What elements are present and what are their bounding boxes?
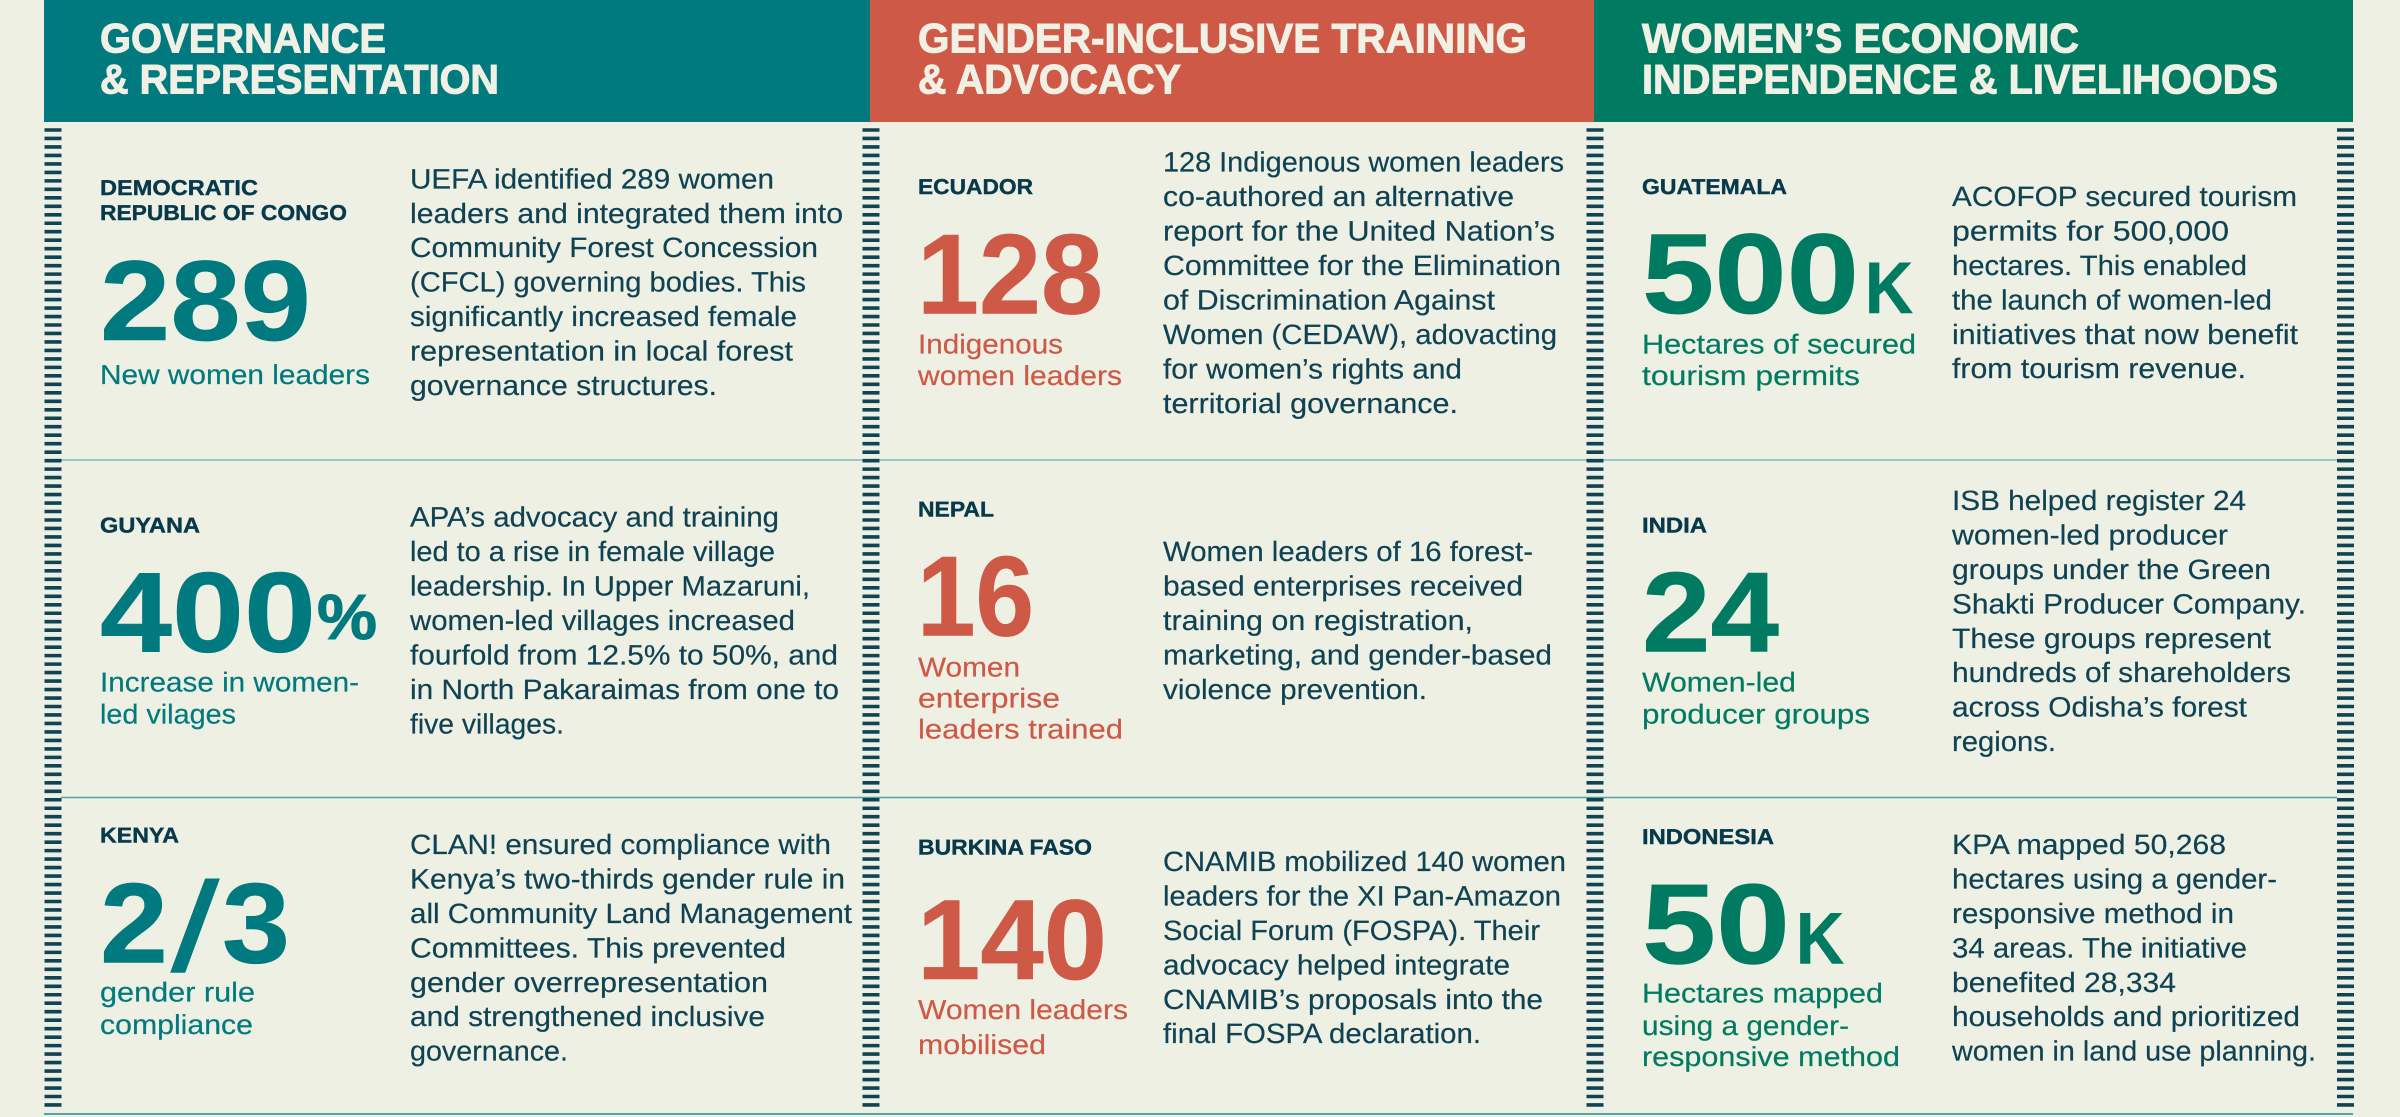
stat label [918, 652, 1123, 744]
card: Nepal [917, 498, 1552, 744]
card: Kenya [100, 823, 852, 1067]
description: responsive method in [1952, 898, 2234, 929]
card: Democratic Republic of Congo [100, 163, 843, 401]
description: across Odisha’s forest [1952, 692, 2247, 723]
description: leaders for the XI Pan-Amazon [1163, 880, 1561, 911]
heading: women's economic independence and livelihoods [1594, 0, 2353, 122]
big number: 140: 140 [917, 877, 1107, 1004]
stat label: mobilised [918, 1029, 1046, 1060]
heading: gender-inclusive training and advocacy: & ADVOCACY [918, 55, 1181, 102]
panel: gender-inclusive training and advocacy column [870, 0, 1594, 1060]
stat label [100, 977, 255, 1040]
heading: governance and representation: GOVERNANCE [100, 14, 386, 62]
heading: governance and representation: & REPRESENTATION [100, 55, 499, 102]
big number: 2/3: / [171, 856, 220, 998]
stat label: producer groups [1642, 698, 1870, 729]
description: the launch of women-led [1952, 284, 2272, 315]
description: ISB helped register 24 [1952, 485, 2246, 516]
description: final FOSPA declaration. [1163, 1018, 1481, 1049]
description [1163, 846, 1566, 1049]
description: Committees. This prevented [410, 932, 786, 963]
description: Women (CEDAW), adovacting [1163, 319, 1557, 350]
description: governance structures. [410, 370, 717, 401]
big number: 289: 289 [100, 238, 311, 365]
heading: women's economic independence and livelihoods: WOMEN’S ECONOMIC [1642, 14, 2079, 62]
stat label: women leaders [917, 360, 1122, 391]
stat label: gender rule [100, 977, 255, 1008]
description: marketing, and gender-based [1163, 639, 1552, 670]
description [409, 502, 839, 739]
big number: 2/3 [100, 856, 290, 998]
description: households and prioritized [1952, 1001, 2300, 1032]
big number: 50K: 50 [1642, 861, 1790, 988]
description: leadership. In Upper Mazaruni, [410, 571, 810, 602]
description [410, 829, 852, 1067]
description: gender overrepresentation [410, 967, 768, 998]
stat label: Women leaders [918, 994, 1128, 1025]
description: violence prevention. [1163, 674, 1427, 705]
country label: KENYA [100, 823, 179, 847]
description [1163, 147, 1564, 419]
country label: NEPAL [918, 498, 994, 522]
description: based enterprises received [1163, 570, 1523, 601]
description [1951, 829, 2316, 1067]
description: Community Forest Concession [410, 232, 818, 263]
big number: 16: 16 [917, 534, 1034, 661]
big number: 400%: 400 [100, 550, 316, 677]
description: territorial governance. [1163, 388, 1458, 419]
description: 128 Indigenous women leaders [1163, 147, 1564, 178]
card: Indonesia [1642, 825, 2316, 1072]
description: CNAMIB’s proposals into the [1163, 984, 1543, 1015]
heading: gender-inclusive training and advocacy: GENDER-INCLUSIVE TRAINING [918, 14, 1527, 62]
stat label [917, 328, 1122, 391]
description: and strengthened inclusive [410, 1001, 765, 1032]
panel: women's economic independence and livelihoods column [1594, 0, 2353, 1072]
big number: 400%: % [317, 581, 377, 653]
description: Social Forum (FOSPA). Their [1163, 915, 1540, 946]
description: KPA mapped 50,268 [1952, 829, 2226, 860]
description: ACOFOP secured tourism [1952, 181, 2297, 212]
description: fourfold from 12.5% to 50%, and [410, 640, 838, 670]
description: of Discrimination Against [1163, 284, 1495, 316]
card: Burkina Faso [917, 836, 1566, 1060]
description: hectares using a gender- [1952, 863, 2277, 894]
description: (CFCL) governing bodies. This [410, 267, 806, 298]
stat label [1642, 667, 1870, 729]
panel: governance and representation column [44, 0, 870, 1067]
card: Ecuador [917, 147, 1564, 419]
stat label: Women-led [1642, 667, 1796, 698]
description: groups under the Green [1952, 554, 2271, 585]
big number: 2/3: 2 [100, 861, 168, 988]
description: permits for 500,000 [1952, 215, 2229, 246]
description: leaders and integrated them into [410, 198, 843, 229]
description [410, 163, 843, 401]
stat label: Hectares mapped [1642, 978, 1883, 1009]
description [1952, 181, 2298, 384]
description: CNAMIB mobilized 140 women [1163, 846, 1566, 877]
description: significantly increased female [410, 301, 797, 332]
description: These groups represent [1952, 623, 2271, 654]
stat label: tourism permits [1642, 360, 1860, 391]
description: from tourism revenue. [1952, 353, 2246, 384]
description: for women’s rights and [1163, 353, 1462, 384]
description: Shakti Producer Company. [1952, 588, 2306, 619]
description: governance. [410, 1036, 568, 1067]
country label: ECUADOR [918, 175, 1033, 199]
stat label: Increase in women- [100, 667, 359, 698]
description: all Community Land Management [410, 898, 852, 929]
country label: INDIA [1642, 513, 1707, 537]
big number: 500K: K [1865, 248, 1913, 329]
big number: 500K: 500 [1642, 211, 1859, 338]
stat label: Women [918, 652, 1020, 683]
card: Guyana [100, 502, 839, 739]
big number: 50K: K [1796, 898, 1844, 979]
description: Kenya’s two-thirds gender rule in [410, 863, 845, 894]
description: in North Pakaraimas from one to [410, 674, 839, 705]
card: Guatemala [1642, 175, 2298, 391]
stat label [1642, 978, 1900, 1072]
country label: BURKINA FASO [918, 836, 1092, 860]
description: hectares. This enabled [1952, 250, 2247, 281]
description: initiatives that now benefit [1952, 319, 2298, 350]
stat label: leaders trained [918, 713, 1123, 744]
stat label: compliance [100, 1009, 253, 1040]
big number: 50K [1642, 861, 1844, 988]
stat label: Indigenous [918, 328, 1063, 359]
heading: governance and representation [44, 0, 870, 122]
description: Women leaders of 16 forest- [1163, 536, 1533, 567]
description: regions. [1952, 726, 2056, 757]
stat label [100, 667, 359, 729]
card: India [1642, 485, 2306, 757]
stat label [1642, 328, 1916, 391]
stat label: responsive method [1642, 1041, 1900, 1072]
description: representation in local forest [410, 336, 793, 367]
description: five villages. [410, 708, 564, 739]
description: benefited 28,334 [1952, 967, 2176, 998]
description: Committee for the Elimination [1163, 250, 1561, 281]
country label: GUYANA [100, 513, 200, 537]
heading: women's economic independence and livelihoods: INDEPENDENCE & LIVELIHOODS [1642, 55, 2278, 102]
description: UEFA identified 289 women [410, 163, 774, 194]
heading: gender-inclusive training and advocacy [870, 0, 1594, 122]
stat label [918, 994, 1128, 1060]
description: CLAN! ensured compliance with [410, 829, 831, 860]
description: hundreds of shareholders [1952, 657, 2291, 688]
big number: 400% [100, 550, 377, 677]
description: 34 areas. The initiative [1952, 932, 2247, 963]
description: training on registration, [1163, 605, 1473, 636]
description: APA’s advocacy and training [410, 502, 779, 533]
description: advocacy helped integrate [1163, 949, 1510, 980]
country label: REPUBLIC OF CONGO [100, 201, 347, 225]
stat label: Hectares of secured [1642, 328, 1916, 359]
stat label: using a gender- [1642, 1010, 1849, 1041]
stat label: New women leaders [100, 359, 370, 390]
description [1951, 485, 2306, 757]
stat label: enterprise [918, 682, 1060, 713]
country label [100, 176, 347, 225]
description: women in land use planning. [1951, 1036, 2316, 1067]
description: led to a rise in female village [410, 536, 775, 567]
stat label: led vilages [100, 698, 236, 729]
description: women-led producer [1951, 519, 2228, 550]
description: report for the United Nation’s [1163, 216, 1555, 247]
country label: GUATEMALA [1642, 175, 1787, 199]
big number: 24: 24 [1642, 550, 1779, 677]
big number: 2/3: 3 [222, 861, 290, 988]
country label: INDONESIA [1642, 825, 1774, 849]
big number: 128: 128 [917, 211, 1103, 338]
description: co-authored an alternative [1163, 181, 1514, 212]
description [1163, 536, 1552, 705]
country label: DEMOCRATIC [100, 176, 258, 200]
description: women-led villages increased [409, 605, 795, 636]
